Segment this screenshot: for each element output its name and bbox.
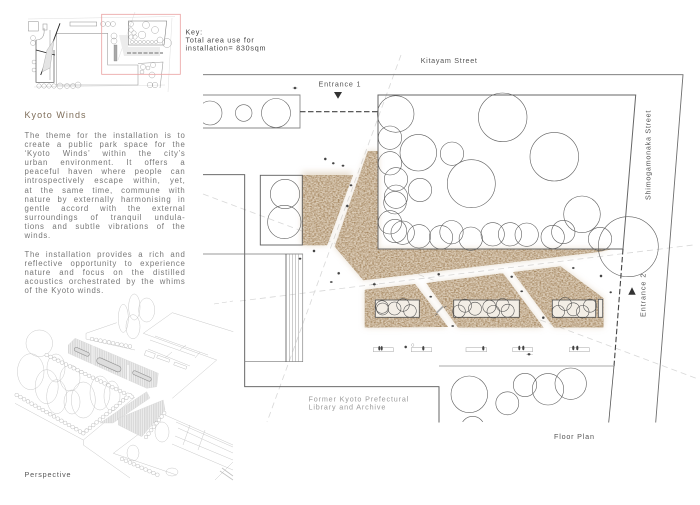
text block: description: reflective opportunity to experience bbox=[24, 259, 186, 268]
heading: Kyoto Winds: Kyoto Winds bbox=[24, 110, 87, 120]
key map bbox=[28, 12, 180, 92]
text block: description: surroundings of tranquil undula- bbox=[24, 213, 186, 222]
label: former library: Library and Archive bbox=[308, 403, 386, 412]
plan: sand fields bbox=[302, 151, 612, 328]
text block: description: introspectively escape within, yet, bbox=[24, 176, 186, 185]
text block: description: gentle accord with the external bbox=[24, 204, 186, 213]
plan: entrance 1 dashed gate bbox=[300, 111, 378, 113]
perspective: tree rows bbox=[17, 339, 165, 475]
perspective: planters bbox=[74, 347, 152, 382]
plan: entrance 2 arrow bbox=[628, 287, 636, 295]
text block: description: winds. bbox=[24, 231, 51, 240]
plan: left planting block bbox=[260, 175, 302, 245]
plan: former library building bbox=[203, 175, 439, 422]
floor plan bbox=[198, 55, 698, 440]
text block: description: urban environment. It offers a bbox=[24, 158, 186, 167]
plan: lower tree block bbox=[439, 365, 614, 422]
perspective: reed installation bbox=[68, 338, 165, 437]
text block: description: nature by externally harmonising in bbox=[24, 195, 186, 204]
text block: description: nature and focus on the distilled bbox=[24, 268, 186, 277]
plan: sand glow bbox=[302, 151, 612, 328]
text block: description bbox=[24, 130, 186, 295]
label: former library: Former Kyoto Prefectural bbox=[308, 394, 409, 404]
text block: description: at the same time, commune with bbox=[24, 186, 186, 195]
key text bbox=[186, 28, 266, 52]
perspective: site outlines bbox=[15, 397, 135, 445]
label: Shimogamonaka Street: Shimogamonaka Street bbox=[644, 110, 652, 200]
key text: installation= 830sqm bbox=[186, 44, 266, 52]
key text: Total area use for bbox=[186, 36, 255, 44]
text block: description: acoustics orchestrated by the whims bbox=[24, 277, 186, 286]
text block: description: The theme for the installation is to bbox=[24, 130, 186, 140]
text block: description: of the Kyoto winds. bbox=[24, 286, 104, 295]
text block: description: peaceful haven where people can bbox=[24, 167, 186, 176]
perspective label: Perspective bbox=[24, 470, 71, 479]
perspective drawing bbox=[15, 294, 233, 480]
plan: planters bbox=[375, 298, 603, 318]
text block: description: The installation provides a rich and bbox=[24, 250, 186, 259]
plan: street edges bbox=[203, 75, 683, 422]
plan: entrance 2 dashed gate bbox=[614, 249, 623, 366]
plan: benches bbox=[373, 348, 589, 352]
plan: axis dashed lines bbox=[203, 55, 698, 422]
label: entrance 1: Entrance 1 bbox=[318, 80, 361, 88]
text block: description: tions and subtle vibrations of the bbox=[24, 222, 186, 231]
text block: description: create a public park space for the bbox=[24, 140, 186, 149]
key text: Key: bbox=[186, 28, 203, 36]
label: floor plan: Floor Plan bbox=[554, 432, 595, 441]
plan: main tree block bbox=[377, 93, 658, 277]
plan: entrance block bbox=[198, 95, 300, 128]
plan: entrance 1 arrow bbox=[334, 92, 342, 99]
plan: small visitor figures bbox=[292, 86, 612, 355]
label: Kitayam Street: Kitayam Street bbox=[421, 56, 478, 65]
label: entrance 2: Entrance 2 bbox=[638, 273, 648, 317]
perspective: trees bbox=[17, 294, 178, 476]
text block: description: ‘Kyoto Winds’ within the city’s bbox=[24, 149, 186, 158]
